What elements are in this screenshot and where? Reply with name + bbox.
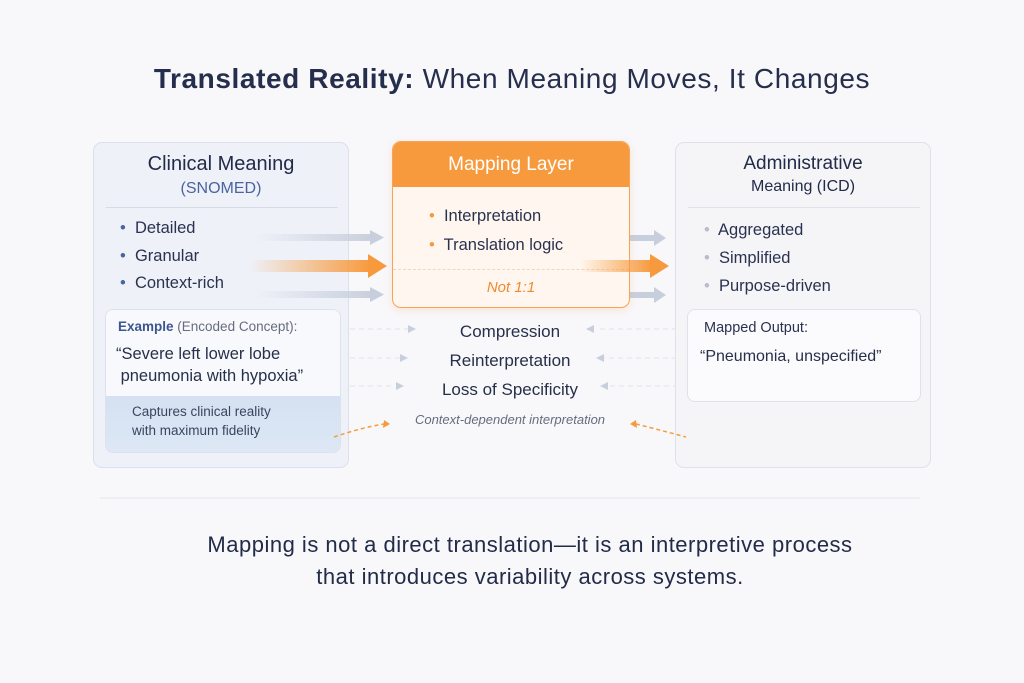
title: Translated Reality: When Meaning Moves, It Changes bbox=[154, 63, 870, 94]
bullets: clinical bbox=[120, 219, 224, 292]
example box: Captures clinical reality bbox=[132, 404, 271, 419]
bottom statement: that introduces variability across systems. bbox=[316, 564, 744, 589]
heading: mapping bbox=[393, 142, 629, 187]
transformation labels: Compression bbox=[460, 322, 560, 341]
heading: administrative: Administrative bbox=[743, 153, 863, 174]
transformation labels: Loss of Specificity bbox=[442, 380, 578, 399]
panel: clinical meaning bbox=[93, 142, 349, 468]
panel: administrative meaning bbox=[675, 142, 931, 468]
bullets: clinical: • Granular bbox=[120, 246, 199, 264]
heading: mapping: Mapping Layer bbox=[448, 154, 574, 175]
heading: clinical bbox=[148, 153, 294, 197]
panel: mapping layer bbox=[392, 141, 630, 308]
bullets: clinical: • Context-rich bbox=[120, 274, 224, 292]
bottom statement: Mapping is not a direct translation—it is an interpretive process bbox=[207, 532, 853, 557]
bullets: administrative: • Aggregated bbox=[704, 221, 803, 239]
mapped output box: Mapped Output: bbox=[704, 320, 808, 336]
heading: clinical: Clinical Meaning bbox=[148, 153, 294, 175]
context-dependent label: Context-dependent interpretation bbox=[415, 412, 605, 427]
transformation labels bbox=[442, 322, 578, 399]
arrow: orange right bbox=[584, 254, 669, 278]
mapped output box: “Pneumonia, unspecified” bbox=[700, 348, 881, 365]
bottom statement bbox=[207, 532, 853, 589]
bullets: clinical: • Detailed bbox=[120, 219, 196, 237]
heading: clinical: (SNOMED) bbox=[181, 180, 261, 197]
bullets: mapping: • Translation logic bbox=[429, 236, 563, 254]
bullets: administrative: • Simplified bbox=[704, 249, 790, 267]
transformation labels: Reinterpretation bbox=[450, 351, 570, 370]
not 1:1: Not 1:1 bbox=[487, 279, 535, 296]
bullets: administrative: • Purpose-driven bbox=[704, 277, 831, 295]
heading: administrative bbox=[743, 153, 863, 195]
mapped output box bbox=[687, 309, 921, 402]
example box bbox=[105, 309, 341, 453]
example box: Example (Encoded Concept): bbox=[118, 319, 297, 334]
example box: “Severe left lower lobe bbox=[116, 345, 280, 363]
example box: with maximum fidelity bbox=[132, 423, 260, 438]
bullets: administrative bbox=[704, 221, 831, 295]
bullets: mapping: • Interpretation bbox=[429, 207, 541, 225]
heading: administrative: Meaning (ICD) bbox=[751, 178, 855, 195]
example box: pneumonia with hypoxia” bbox=[121, 367, 303, 385]
bullets: mapping bbox=[429, 207, 563, 254]
